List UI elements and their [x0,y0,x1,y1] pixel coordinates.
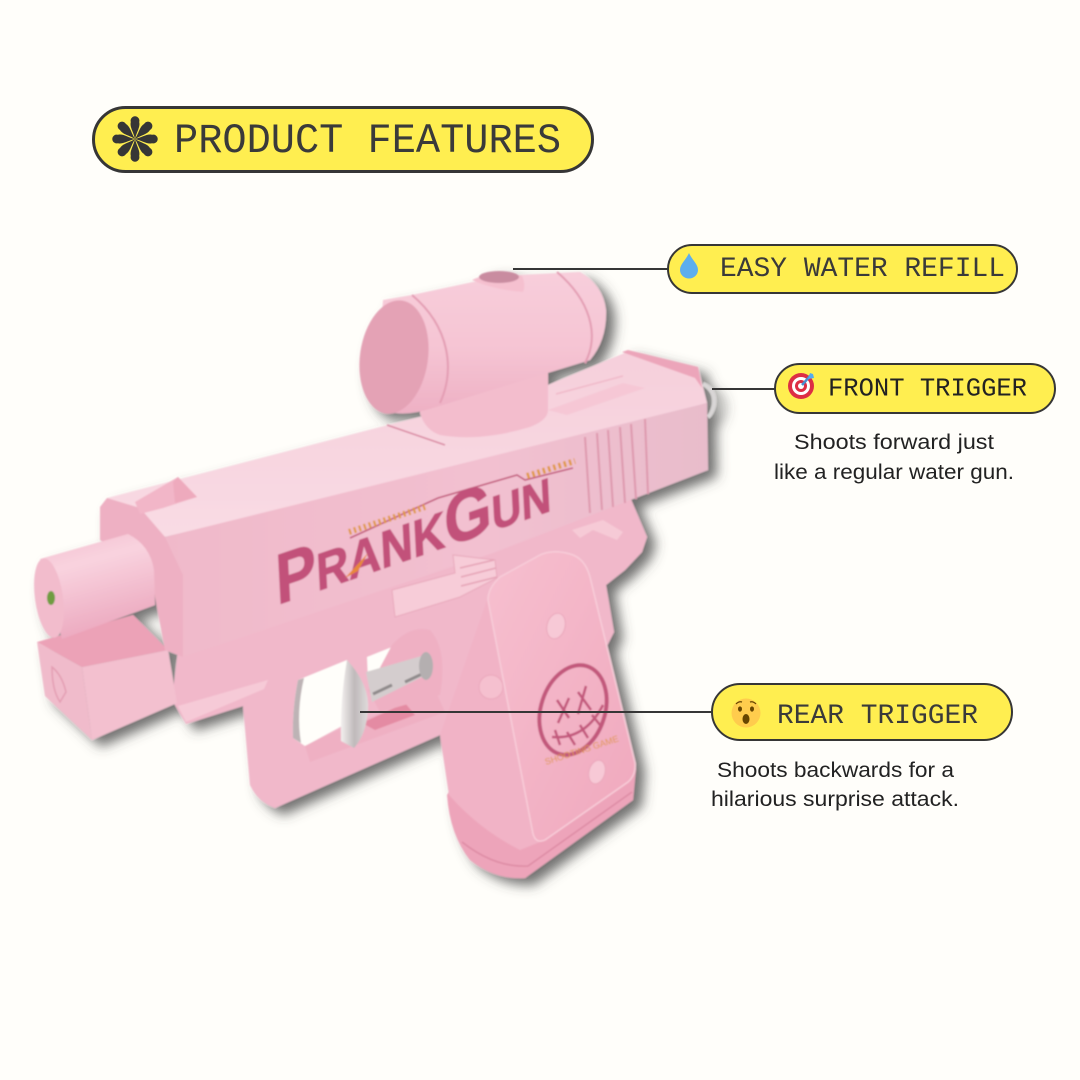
scope tube [352,271,606,418]
logo caption: SHOOTING GAME [544,734,620,767]
grip back panel [440,597,540,850]
grip plate [488,552,635,841]
small side lever [572,520,623,540]
caption: front trigger: Shoots forward just [794,431,994,454]
frame and trigger guard [172,497,647,808]
lower rail front block [37,615,177,740]
rear sight rail [622,350,702,388]
caption: rear trigger: Shoots backwards for a [717,759,954,782]
product illustration: pink water gun [30,271,714,878]
barrel [30,534,155,640]
water refill hole [472,273,524,292]
leader line: rear trigger [360,711,712,713]
safety lever [392,555,497,617]
caption: front trigger: like a regular water gun. [774,461,1014,484]
icon: surprised face [732,698,760,728]
icon: water drop [680,253,698,278]
callout: front trigger [775,364,1055,413]
callout: easy water refill [668,245,1017,293]
grip base [447,768,636,878]
slide [100,350,714,657]
scope mount base line [387,425,445,445]
icon: flower [112,116,158,162]
scope mount stem [420,372,548,437]
rear trigger [341,660,368,748]
logo orange accent [345,553,368,578]
heading text: PRODUCT FEATURES [174,117,561,165]
callout: rear trigger [712,684,1012,740]
logo text: PRANKGUN [274,448,553,621]
front sight [135,477,197,514]
smiley logo [528,656,620,767]
label: REAR TRIGGER [777,701,978,732]
caption: front trigger [774,431,1014,484]
leader line: front trigger [712,388,775,390]
label: EASY WATER REFILL [720,254,1005,285]
caption: rear trigger: hilarious surprise attack. [711,788,959,811]
grip screws [544,611,608,786]
rear ring [703,384,714,417]
icon: target [788,373,814,399]
logo stripes [350,468,573,538]
rear trigger rod [366,652,433,702]
frame pin [479,675,503,699]
serrations [585,419,648,513]
caption: rear trigger [711,759,959,811]
leader line: refill [513,268,668,270]
label: FRONT TRIGGER [828,374,1027,404]
title badge [94,108,592,172]
